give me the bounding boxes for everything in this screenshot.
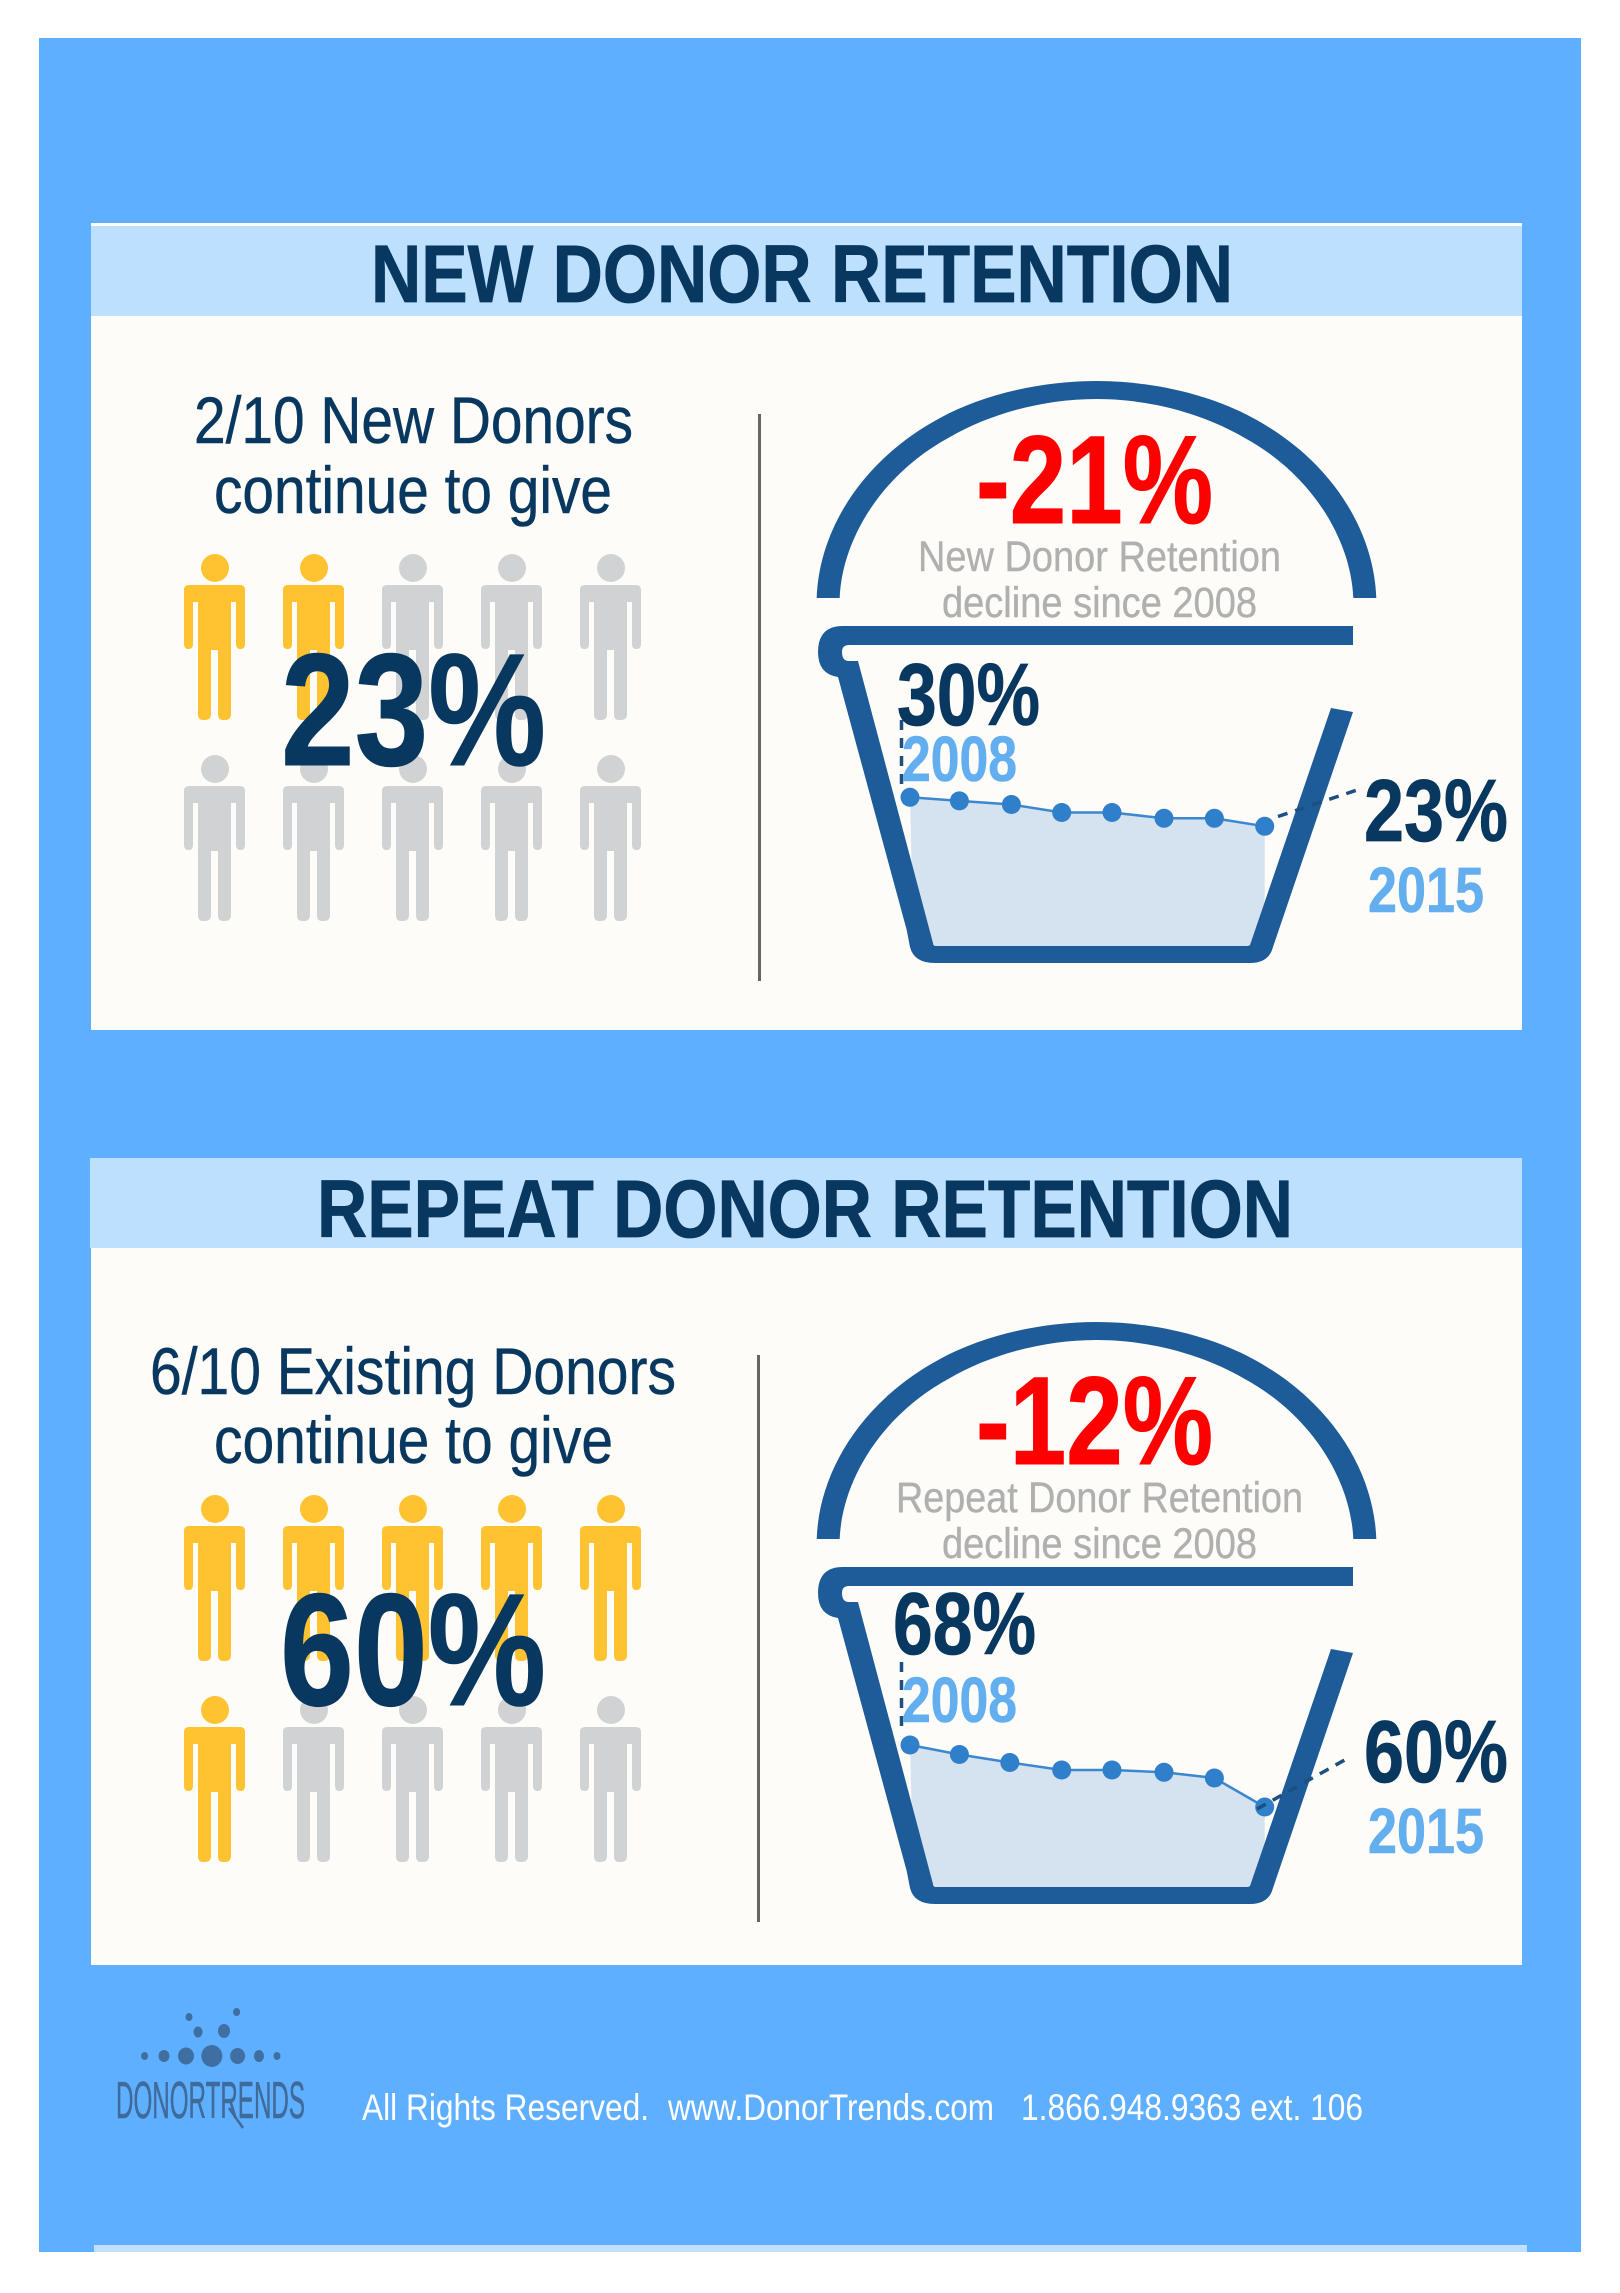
panel: repeat donor retention bbox=[90, 1158, 1522, 1965]
text: DONORTRENDS bbox=[116, 2072, 305, 2130]
label: 30% 2008: 2008 bbox=[902, 723, 1017, 795]
text: 6/10 existing donors: continue to give bbox=[214, 1403, 613, 1477]
heading: new donor retention: NEW DONOR RETENTION bbox=[371, 229, 1233, 320]
label: 23% 2015: 2015 bbox=[1368, 854, 1484, 926]
text: 2/10 new donors: continue to give bbox=[214, 453, 612, 527]
text: new donor retention decline: decline since 2008 bbox=[942, 579, 1257, 627]
logo: donortrends bbox=[116, 2008, 305, 2130]
icons: ten people, six highlighted bbox=[184, 1495, 641, 1862]
text: repeat donor retention decline bbox=[896, 1474, 1303, 1568]
label: 68% 2008: 2008 bbox=[902, 1664, 1017, 1736]
label: 68% 2008: 68% bbox=[893, 1574, 1036, 1673]
label: 60% 2015: 2015 bbox=[1368, 1795, 1484, 1867]
footer text: All Rights Reserved. bbox=[362, 2087, 649, 2128]
footer text: 1.866.948.9363 ext. 106 bbox=[1021, 2087, 1363, 2128]
big number: 23%: 23% bbox=[281, 620, 546, 799]
label: 23% 2015 bbox=[1364, 761, 1508, 926]
text: 6/10 existing donors bbox=[150, 1334, 676, 1477]
label: 60% 2015 bbox=[1364, 1702, 1508, 1867]
text: new donor retention decline bbox=[918, 533, 1281, 627]
text: new donor retention decline: New Donor Retention bbox=[918, 533, 1281, 581]
chart: new donor bucket bbox=[817, 381, 1376, 963]
text: 2/10 new donors bbox=[194, 383, 633, 527]
panel: new donor retention bbox=[91, 223, 1522, 1030]
callout: -12%: -12% bbox=[976, 1352, 1213, 1491]
text: 2/10 new donors: 2/10 New Donors bbox=[194, 383, 633, 457]
chart: repeat donor bucket bbox=[817, 1322, 1376, 1904]
callout: -21%: -21% bbox=[976, 411, 1213, 550]
big number: 60%: 60% bbox=[280, 1560, 546, 1739]
icons: ten people, two highlighted bbox=[184, 554, 641, 921]
label: 68% 2008 bbox=[893, 1574, 1036, 1736]
footer text bbox=[362, 2087, 1363, 2128]
text: 6/10 existing donors: 6/10 Existing Donors bbox=[150, 1334, 676, 1408]
label: 30% 2008 bbox=[897, 645, 1040, 795]
text: repeat donor retention decline: decline since 2008 bbox=[942, 1520, 1257, 1568]
text: repeat donor retention decline: Repeat Donor Retention bbox=[896, 1474, 1303, 1522]
label: 30% 2008: 30% bbox=[897, 645, 1040, 744]
footer text: www.DonorTrends.com bbox=[667, 2087, 994, 2128]
label: 23% 2015: 23% bbox=[1364, 761, 1508, 860]
heading: repeat donor retention: REPEAT DONOR RETENTION bbox=[317, 1164, 1293, 1255]
label: 60% 2015: 60% bbox=[1364, 1702, 1508, 1801]
